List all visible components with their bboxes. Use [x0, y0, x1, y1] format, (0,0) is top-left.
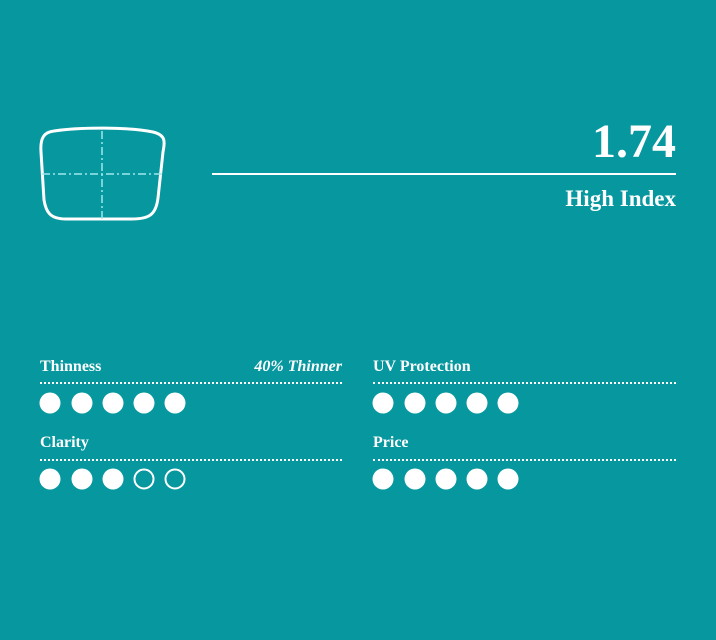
panel: price — [372, 434, 676, 490]
title: 1.74: 1.74 — [592, 115, 676, 168]
divider line — [212, 173, 676, 175]
panel: thinness: Thinness — [40, 358, 101, 375]
panel: thinness — [40, 358, 342, 414]
panel: uv protection: UV Protection — [373, 358, 471, 375]
panel: thinness: 40% Thinner — [254, 358, 342, 375]
panel: price: Price — [373, 434, 409, 451]
panel: clarity — [40, 434, 342, 490]
subtitle: High Index — [565, 186, 676, 211]
icon: lens — [39, 126, 166, 220]
panel: clarity: Clarity — [40, 434, 89, 451]
panel: uv protection — [372, 358, 676, 414]
